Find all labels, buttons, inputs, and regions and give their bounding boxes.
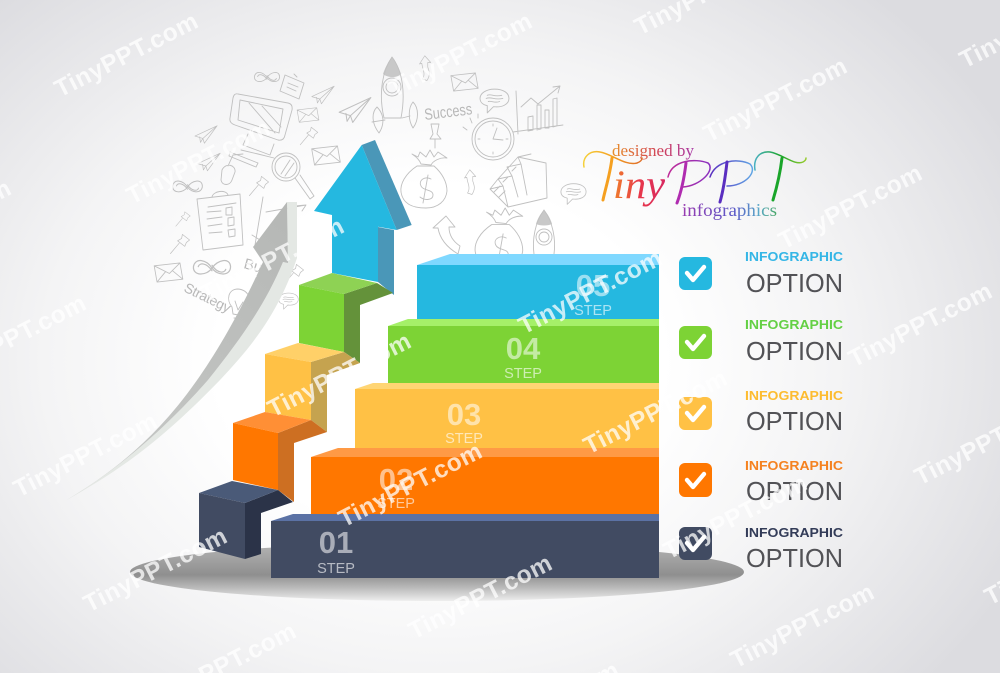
icon: light bulb xyxy=(229,289,249,319)
orange block xyxy=(233,412,327,502)
watermarks: TinyPPT.com xyxy=(774,160,927,255)
option 4 xyxy=(679,458,844,506)
icon: speech bubbles xyxy=(279,89,586,309)
option 2: OPTION xyxy=(746,338,843,366)
option 2 xyxy=(679,317,844,366)
label: Strategy: Strategy xyxy=(182,279,234,316)
option 1: INFOGRAPHIC xyxy=(745,249,844,264)
icon: envelopes xyxy=(154,73,478,282)
step 01 bar: STEP xyxy=(317,561,355,577)
option 2: INFOGRAPHIC xyxy=(745,317,844,332)
icon: pins xyxy=(170,127,318,284)
option 4: OPTION xyxy=(746,478,843,506)
option 1 xyxy=(679,249,844,298)
icon: pushpin top xyxy=(430,124,441,148)
label: Success: Success xyxy=(423,101,473,124)
doodle cloud xyxy=(154,56,586,319)
option 3 xyxy=(679,388,844,436)
icon: note xyxy=(280,74,304,99)
arrow head and shaft xyxy=(314,140,412,295)
step 02 bar xyxy=(311,448,659,514)
step 04 bar xyxy=(388,319,659,384)
option 5: OPTION xyxy=(746,545,843,573)
watermarks: TinyPPT.com xyxy=(844,278,997,373)
step 03 bar: STEP xyxy=(445,431,483,447)
watermarks: TinyPPT.com xyxy=(659,470,812,565)
step 03 bar xyxy=(355,383,659,448)
watermarks: TinyPPT.com xyxy=(9,408,162,503)
watermarks: TinyPPT.com xyxy=(79,523,232,618)
watermarks: TinyPPT.com xyxy=(404,550,557,645)
icon: rockets xyxy=(372,57,555,254)
ground shadow xyxy=(130,543,744,601)
option 1: OPTION xyxy=(746,270,843,298)
icon: monitor xyxy=(229,94,292,167)
icon: stairs xyxy=(490,154,547,207)
watermarks: TinyPPT.com xyxy=(263,328,416,423)
navy block xyxy=(199,481,293,559)
watermarks: TinyPPT.com xyxy=(122,115,275,210)
step 02 bar: 02 xyxy=(379,462,413,497)
watermarks: TinyPPT.com xyxy=(384,8,537,103)
icon: arrows xyxy=(420,56,476,254)
step 02 bar: STEP xyxy=(377,496,415,512)
watermarks: TinyPPT.com xyxy=(334,438,487,533)
watermarks: TinyPPT.com xyxy=(196,213,349,308)
staircase arrow xyxy=(199,140,412,559)
step 01 bar xyxy=(271,514,659,578)
logo: designed by TinyPPT infographics: iny xyxy=(613,162,665,207)
icon: magnifier xyxy=(272,153,314,199)
icon: paper planes xyxy=(195,86,371,171)
step 05 bar: STEP xyxy=(574,303,612,319)
logo: designed by TinyPPT infographics: designed by xyxy=(612,141,694,160)
option 5 xyxy=(679,525,844,573)
icon: line chart left xyxy=(252,197,306,245)
option 3: INFOGRAPHIC xyxy=(745,388,844,403)
watermarks: TinyPPT.com xyxy=(699,53,852,148)
yellow block xyxy=(265,343,360,432)
watermarks: TinyPPT.com xyxy=(579,365,732,460)
step 01 bar: 01 xyxy=(319,525,353,560)
step 04 bar: 04 xyxy=(506,331,541,366)
step 05 bar xyxy=(417,254,659,319)
icon: infinity loops xyxy=(173,72,280,274)
icon: clock xyxy=(463,114,514,160)
option 5: INFOGRAPHIC xyxy=(745,525,844,540)
step 04 bar: STEP xyxy=(504,366,542,382)
icon: clipboard xyxy=(197,191,243,250)
logo: designed by TinyPPT infographics: infographics xyxy=(682,200,777,220)
icon: bar chart right xyxy=(513,86,563,134)
label: Bu: Bu xyxy=(242,255,264,277)
step 05 bar: 05 xyxy=(576,268,610,303)
step 03 bar: 03 xyxy=(447,397,481,432)
option 3: OPTION xyxy=(746,408,843,436)
watermarks: TinyPPT.com xyxy=(514,245,667,340)
green block xyxy=(299,273,393,363)
watermarks: TinyPPT.com xyxy=(50,8,203,103)
icon: mouse xyxy=(221,154,243,184)
icon: money bags xyxy=(401,150,523,268)
curved grey growth arrow xyxy=(65,202,297,501)
watermarks: TinyPPT.com xyxy=(726,579,879,673)
option 4: INFOGRAPHIC xyxy=(745,458,844,473)
logo: designed by TinyPPT infographics xyxy=(584,141,806,220)
